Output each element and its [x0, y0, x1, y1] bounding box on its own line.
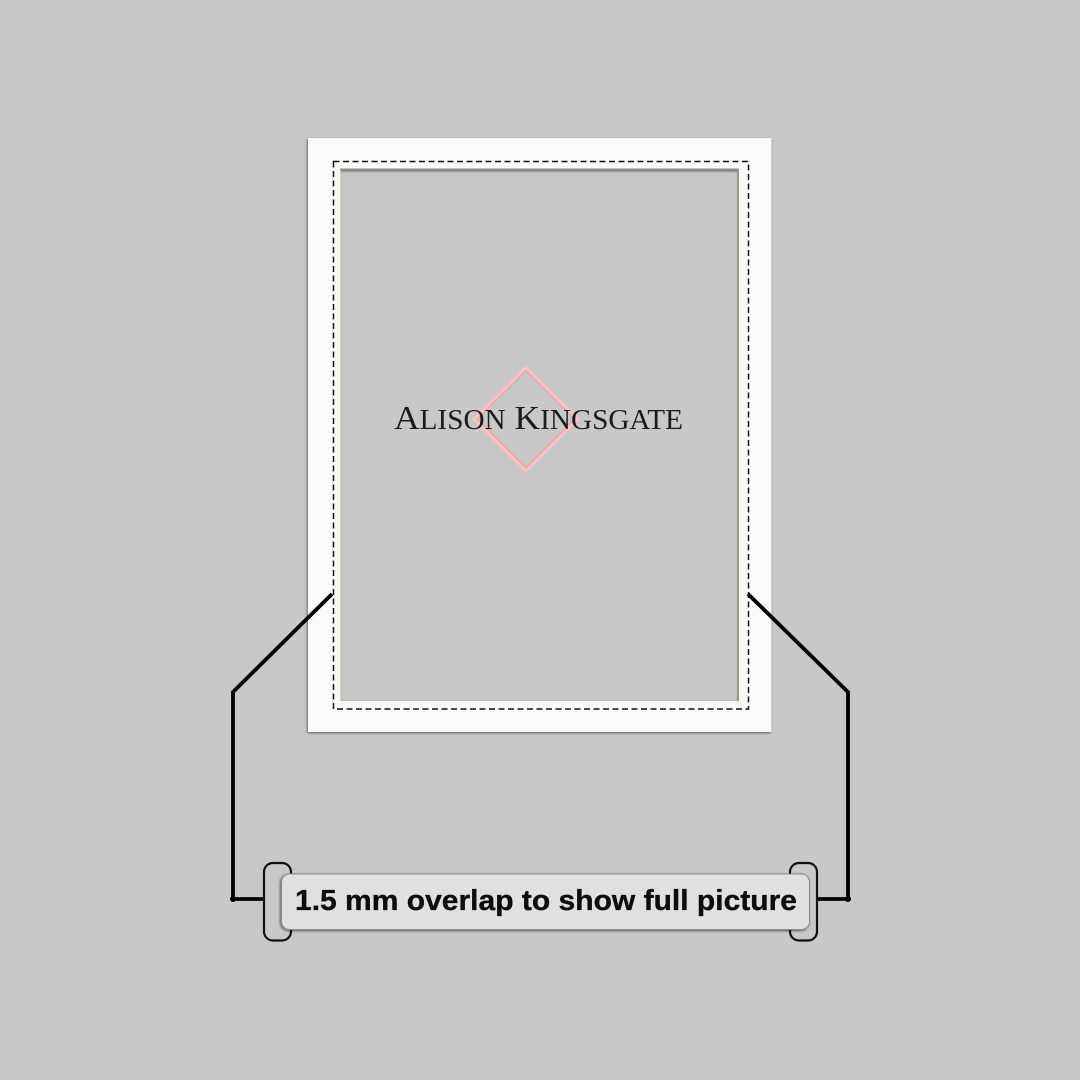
- right leader line: [748, 594, 851, 902]
- logo: Alison Kingsgate: [394, 368, 683, 471]
- logo diamond: [474, 368, 578, 471]
- white mount frame: [308, 138, 772, 732]
- label: overlap callout: [264, 863, 817, 940]
- logo wordmark: ALISON KINGSGATE: [394, 400, 683, 437]
- label plate: [282, 874, 810, 930]
- left bracket tab: [264, 863, 291, 940]
- left leader line: [230, 594, 332, 902]
- dashed cut line: [334, 162, 748, 709]
- right bracket tab: [790, 863, 817, 940]
- label text: 1.5 mm overlap to show full picture: [295, 885, 797, 917]
- inner bevel: [336, 164, 744, 706]
